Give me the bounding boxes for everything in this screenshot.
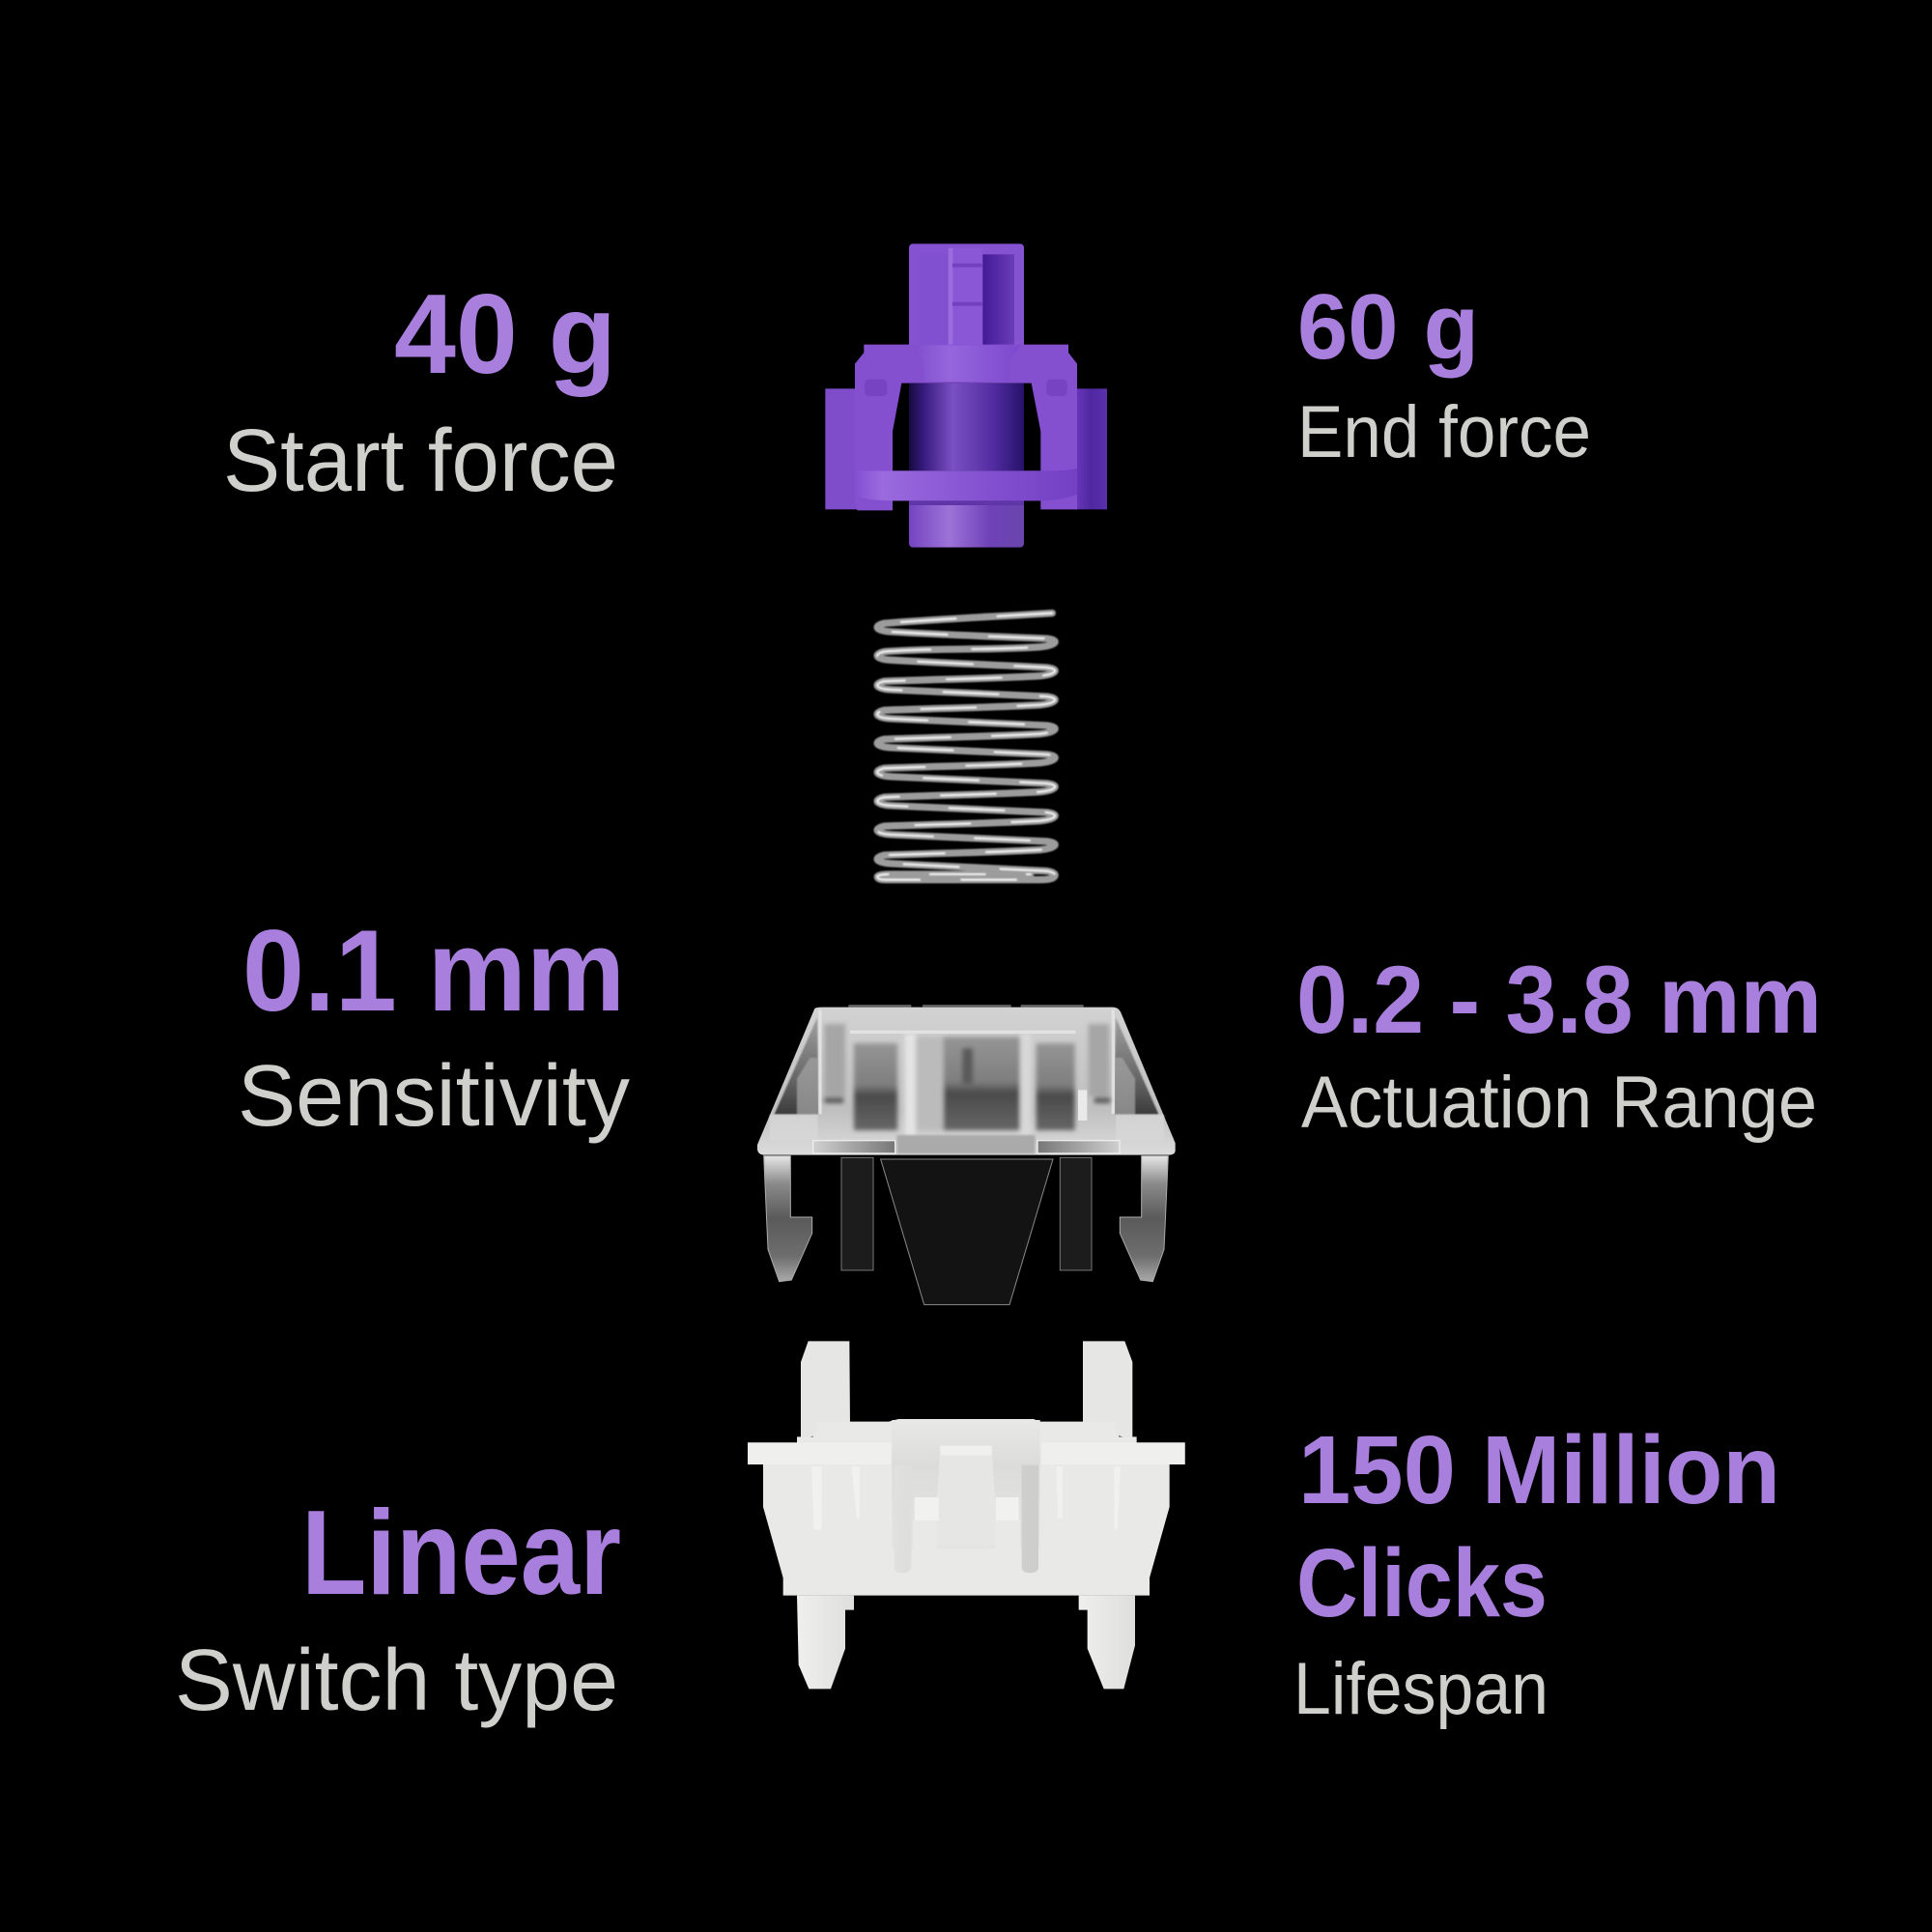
- value: lifespan 150 million clicks: Clicks: [1296, 1529, 1548, 1637]
- label: switch type: Switch type: [175, 1633, 618, 1729]
- value: switch type linear: Linear: [301, 1487, 621, 1620]
- icon: transparent top housing: [757, 1005, 1176, 1305]
- value: lifespan 150 million clicks: 150 Million: [1298, 1416, 1780, 1524]
- housing shell: [757, 1008, 1176, 1155]
- housing centre wedge: [881, 1159, 1053, 1305]
- label: start force: Start force: [223, 412, 618, 510]
- value: start force 40 g: 40 g: [394, 270, 616, 397]
- base posts: [801, 1341, 1132, 1439]
- icon: purple switch stem: [825, 243, 1107, 548]
- base central recess: [892, 1420, 1040, 1577]
- label: lifespan: Lifespan: [1293, 1648, 1548, 1730]
- housing black pillars: [841, 1157, 873, 1270]
- label: end force: End force: [1297, 391, 1591, 473]
- housing top tabs: [848, 1005, 1084, 1008]
- value: actuation range: 0.2 - 3.8 mm: [1296, 946, 1822, 1053]
- value: lifespan 150 million clicks: [1296, 1416, 1780, 1637]
- housing clip legs: [764, 1156, 812, 1282]
- base body: [748, 1419, 1185, 1596]
- value: end force 60 g: 60 g: [1297, 275, 1479, 379]
- label: actuation range: Actuation Range: [1301, 1062, 1817, 1144]
- housing lower cut-outs: [813, 1141, 895, 1153]
- icon: metal spring: [877, 613, 1055, 880]
- base pins: [797, 1596, 854, 1689]
- value: sensitivity 0.1 mm: 0.1 mm: [242, 906, 625, 1036]
- icon: white bottom housing: [748, 1341, 1185, 1689]
- label: sensitivity: Sensitivity: [238, 1048, 630, 1145]
